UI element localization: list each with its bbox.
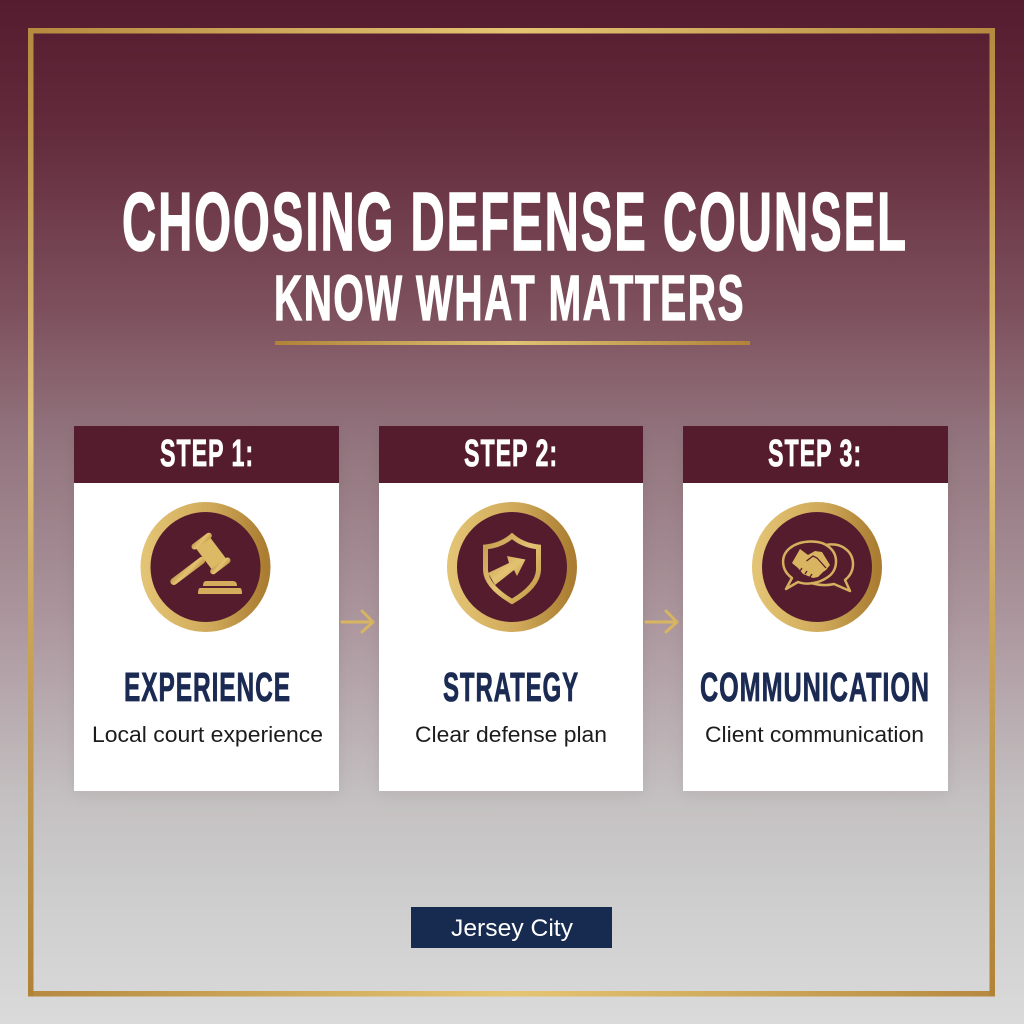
step 1 header: STEP 1:	[160, 433, 254, 475]
step 2 header: STEP 2:	[464, 433, 558, 475]
arrow: step 2 to step 3	[646, 611, 677, 632]
subtitle: KNOW WHAT MATTERS	[274, 262, 745, 334]
card body	[683, 426, 948, 791]
location badge: Jersey City	[451, 915, 573, 942]
card body	[74, 426, 339, 791]
location badge	[411, 907, 612, 948]
step 2 header	[379, 426, 643, 483]
strategy description: Clear defense plan	[415, 722, 607, 747]
panel: step 1 experience	[74, 426, 339, 791]
experience description: Local court experience	[92, 722, 323, 747]
communication description: Client communication	[705, 722, 924, 747]
panel: step 3 communication	[683, 426, 948, 791]
step 1 header	[74, 426, 339, 483]
arrow: step 1 to step 2	[342, 611, 373, 632]
icon: handshake in speech bubbles	[757, 507, 877, 627]
icon: gavel	[146, 507, 266, 627]
step 3 header: STEP 3:	[768, 433, 862, 475]
experience heading: EXPERIENCE	[124, 664, 291, 710]
panel: step 2 strategy	[379, 426, 643, 791]
step 3 header	[683, 426, 948, 483]
strategy heading: STRATEGY	[443, 664, 579, 710]
card body	[379, 426, 643, 791]
icon: shield with arrow	[452, 507, 572, 627]
title underline	[275, 341, 750, 345]
